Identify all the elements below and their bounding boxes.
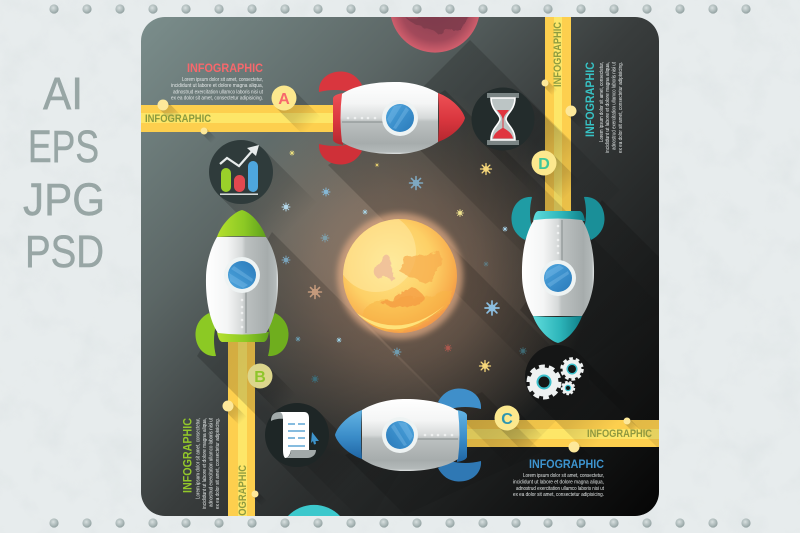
band D <box>545 17 571 213</box>
badge D <box>532 150 556 176</box>
text block B: incididunt ut labore et dolore magna aliqua, <box>202 418 208 509</box>
text block C: INFOGRAPHIC <box>529 457 604 471</box>
planet: teal <box>288 505 340 516</box>
rising arrow <box>220 145 259 166</box>
badge C: C <box>501 411 513 428</box>
rivets: bottom row <box>49 518 751 528</box>
baseline <box>220 194 258 195</box>
text block A: Lorem ipsum dolor sit amet, consectetur, <box>182 77 263 83</box>
format list: AI EPS JPG PSD: PSD <box>25 226 104 277</box>
rocket B: green <box>195 210 289 356</box>
small gear <box>562 382 574 394</box>
text block C: adnostrud exercitation ullamco laboris nisi ut <box>516 486 605 492</box>
red bar <box>234 175 245 192</box>
cursor <box>311 432 319 444</box>
rocket A: red <box>319 71 465 165</box>
format list: AI EPS JPG PSD: EPS <box>28 121 99 172</box>
text block D: INFOGRAPHIC <box>583 62 597 137</box>
text block D: adnostrud exercitation ullamco laboris nisi ut <box>612 61 618 150</box>
text block A: incididunt ut labore et dolore magna aliqua, <box>171 83 263 89</box>
badge A: A <box>278 91 290 108</box>
text block B: INFOGRAPHIC <box>180 418 194 493</box>
badge D: D <box>538 156 550 173</box>
planet: red <box>391 17 479 53</box>
badge B <box>248 364 272 388</box>
format list: AI EPS JPG PSD <box>23 68 105 277</box>
icon: gears <box>525 345 584 400</box>
badge A <box>272 86 296 110</box>
stars <box>282 150 526 382</box>
text block C: incididunt ut labore et dolore magna aliqua, <box>513 480 604 486</box>
text block D <box>583 61 624 153</box>
rivets: top row <box>49 4 751 14</box>
icon: scroll document <box>265 403 329 467</box>
medium gear <box>562 359 582 379</box>
badge B: B <box>254 369 266 386</box>
text block B <box>180 417 221 509</box>
format list: AI EPS JPG PSD: AI <box>43 68 83 119</box>
text block B: ex ea dolor sit amet, consectetur adipisicing. <box>215 418 221 509</box>
large gear <box>529 367 559 397</box>
text block C <box>513 457 605 498</box>
sun <box>336 212 463 339</box>
panel: space scene <box>141 17 659 516</box>
format list: AI EPS JPG PSD: JPG <box>23 174 105 225</box>
band A <box>141 105 334 132</box>
band C <box>466 420 659 447</box>
text block A <box>171 61 264 102</box>
band label A: INFOGRAPHIC <box>145 113 211 125</box>
icon: hourglass <box>472 88 534 150</box>
text block C: ex ea dolor sit amet, consectetur adipisicing. <box>513 492 604 498</box>
band label B: INFOGRAPHIC <box>237 465 249 531</box>
text block C: Lorem ipsum dolor sit amet, consectetur, <box>523 473 604 479</box>
text block A: ex ea dolor sit amet, consectetur adipisicing. <box>171 96 263 102</box>
long shadows <box>160 40 659 499</box>
text block D: Lorem ipsum dolor sit amet, consectetur, <box>599 62 605 142</box>
band label C: INFOGRAPHIC <box>587 428 652 440</box>
text block B: adnostrud exercitation ullamco laboris nisi ut <box>208 417 214 507</box>
text block A: INFOGRAPHIC <box>187 61 263 75</box>
badge C <box>494 406 520 430</box>
text block A: adnostrud exercitation ullamco laboris nisi ut <box>173 90 264 96</box>
band B <box>228 340 255 516</box>
green bar <box>221 168 231 192</box>
text block B: Lorem ipsum dolor sit amet, consectetur, <box>196 418 202 499</box>
text block D: incididunt ut labore et dolore magna aliqua, <box>605 62 611 153</box>
band label D: INFOGRAPHIC <box>552 22 564 87</box>
rocket C: blue <box>335 388 481 482</box>
blue bar <box>248 161 258 192</box>
rocket D: teal <box>511 197 605 343</box>
icon: bar chart <box>209 140 273 204</box>
dots <box>158 80 630 498</box>
text block D: ex ea dolor sit amet, consectetur adipisicing. <box>618 62 624 153</box>
